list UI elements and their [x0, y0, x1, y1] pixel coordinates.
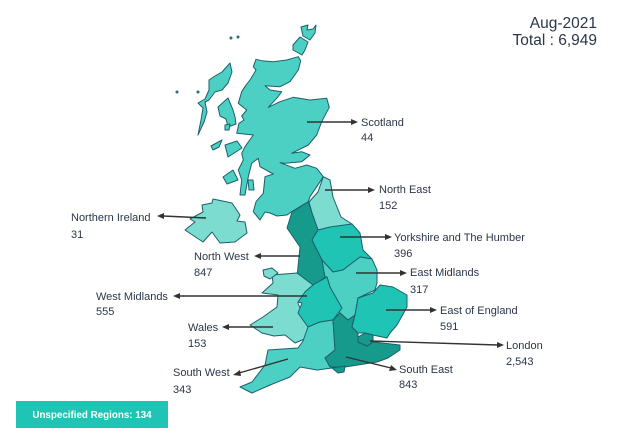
region: Scotland	[176, 25, 329, 220]
label: Northern Ireland: Northern Ireland	[71, 212, 150, 224]
label: South West	[173, 359, 288, 396]
label: East of England: East of England	[440, 305, 518, 317]
label: West Midlands: West Midlands	[96, 291, 168, 303]
label: London: 2,543	[506, 356, 534, 368]
label: London: London	[506, 340, 543, 352]
label: South West: South West	[173, 367, 230, 379]
region: Wales	[250, 273, 313, 343]
label: North West: North West	[194, 251, 249, 263]
label: Scotland	[307, 117, 404, 144]
label: London	[370, 340, 543, 368]
label: South East: 843	[399, 379, 417, 391]
label: Yorkshire and The Humber: Yorkshire and The Humber	[394, 232, 525, 244]
region: North West	[287, 202, 325, 287]
label: North West	[194, 251, 300, 279]
label: East of England	[386, 305, 518, 333]
label: East Midlands	[356, 267, 480, 296]
label: Scotland: 44	[361, 132, 373, 144]
label: West Midlands: 555	[96, 306, 114, 318]
label: North East: North East	[379, 184, 431, 196]
region: West Midlands	[298, 277, 342, 327]
region: East of England	[352, 285, 407, 338]
badge: unspecified regions	[16, 401, 168, 428]
label: South East: South East	[399, 364, 453, 376]
label: North West: 847	[194, 267, 212, 279]
title: date and total	[513, 15, 597, 49]
region: London	[358, 333, 373, 346]
label: West Midlands	[96, 291, 307, 318]
region: East Midlands	[322, 257, 377, 320]
label: South East	[346, 357, 453, 391]
label: Yorkshire and The Humber: 396	[394, 248, 412, 260]
region: Yorkshire and The Humber	[312, 224, 372, 272]
title: date and total: Total : 6,949	[513, 32, 597, 49]
region: South East	[325, 313, 400, 367]
region: South West	[240, 320, 335, 393]
title: date and total: Aug-2021	[530, 15, 597, 32]
label: Yorkshire and The Humber	[340, 232, 525, 260]
label: North East	[325, 184, 431, 212]
region: North East	[309, 177, 352, 230]
region: Northern Ireland	[185, 199, 247, 243]
label: Wales	[188, 322, 273, 350]
label: East Midlands: 317	[410, 284, 428, 296]
label: Scotland: Scotland	[361, 117, 404, 129]
badge: unspecified regions: Unspecified Regions: 134	[32, 410, 152, 421]
label: North East: 152	[379, 200, 397, 212]
map of UK regions	[176, 25, 407, 393]
label: South West: 343	[173, 384, 191, 396]
label: Northern Ireland	[71, 212, 206, 241]
label: Northern Ireland: 31	[71, 229, 83, 241]
label: East of England: 591	[440, 321, 458, 333]
label: East Midlands: East Midlands	[410, 267, 480, 279]
label: Wales: 153	[188, 338, 206, 350]
label: Wales: Wales	[188, 322, 219, 334]
